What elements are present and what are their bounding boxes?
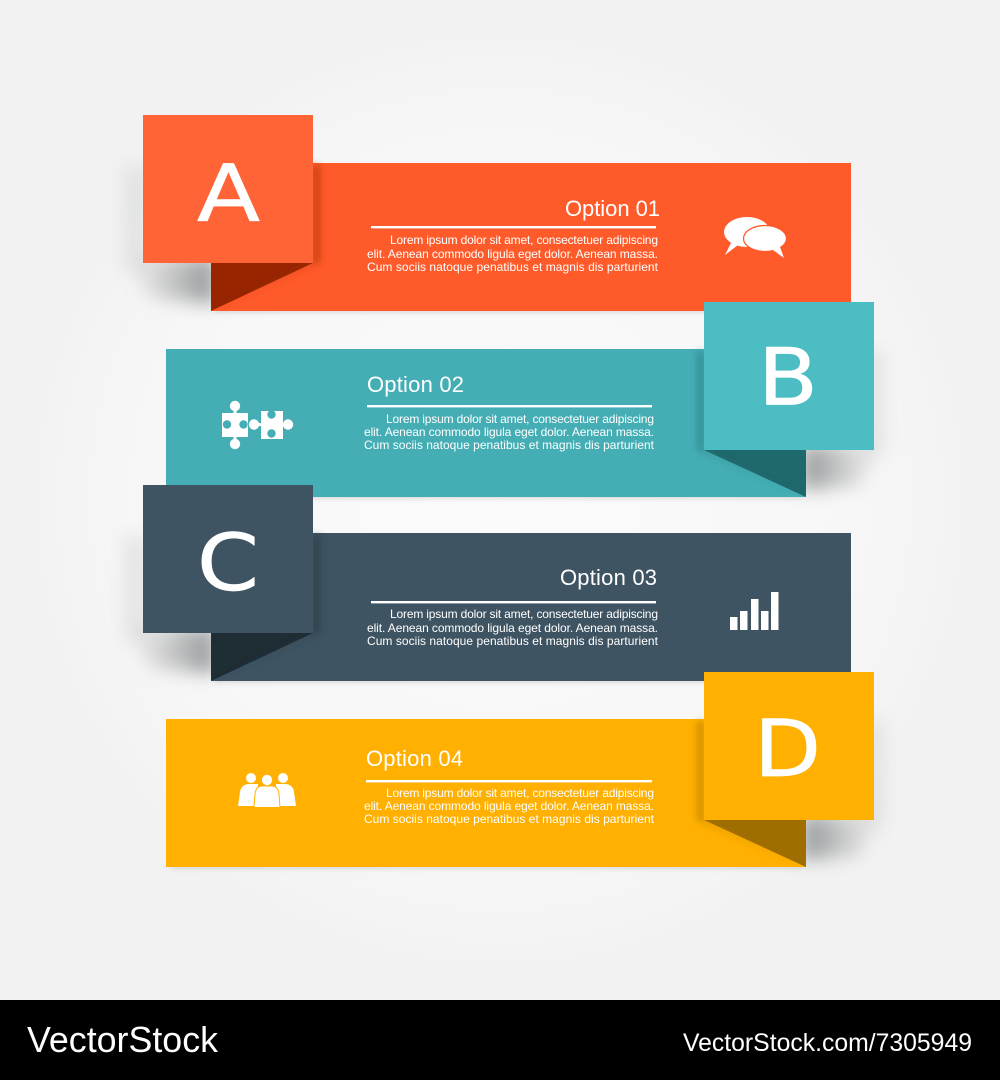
- square C: [143, 485, 313, 633]
- panel: option B: [166, 302, 884, 498]
- letter D: D: [754, 705, 821, 795]
- body text B: Lorem ipsum dolor sit amet, consectetuer adipiscing: [386, 412, 654, 426]
- watermark: image id: VectorStock.com/7305949: [683, 1029, 972, 1057]
- fold D: [704, 820, 806, 867]
- body text D: Cum sociis natoque penatibus et magnis dis parturient: [364, 812, 655, 826]
- fold C: [211, 633, 313, 681]
- body text A: elit. Aenean commodo ligula eget dolor. Aenean massa.: [367, 247, 658, 261]
- icon: bar chart: [730, 592, 778, 630]
- body text B: [364, 412, 655, 452]
- body text B: Cum sociis natoque penatibus et magnis dis parturient: [364, 438, 655, 452]
- fold B: [704, 450, 806, 497]
- body text D: elit. Aenean commodo ligula eget dolor. Aenean massa.: [364, 799, 654, 813]
- heading C: Option 03: [560, 565, 657, 590]
- icon: speech bubbles: [724, 217, 786, 258]
- body text A: [367, 233, 659, 274]
- body text A: Cum sociis natoque penatibus et magnis dis parturient: [367, 260, 659, 274]
- panel: option A: [124, 115, 851, 312]
- icon: puzzle pieces: [222, 401, 293, 449]
- watermark bar: [0, 1000, 1000, 1080]
- letter B: B: [758, 334, 818, 424]
- ribbon C: [211, 533, 851, 681]
- body text C: elit. Aenean commodo ligula eget dolor. Aenean massa.: [367, 621, 658, 635]
- body text C: Cum sociis natoque penatibus et magnis dis parturient: [367, 634, 659, 648]
- heading B: Option 02: [367, 372, 464, 397]
- watermark: brand: VectorStock: [27, 1019, 219, 1060]
- letter C: C: [197, 519, 259, 609]
- body text B: elit. Aenean commodo ligula eget dolor. Aenean massa.: [364, 425, 654, 439]
- body text C: [367, 607, 659, 648]
- ribbon A: [211, 163, 851, 311]
- body text C: Lorem ipsum dolor sit amet, consectetuer adipiscing: [390, 607, 658, 621]
- heading A: Option 01: [565, 196, 660, 221]
- body text D: [364, 786, 655, 826]
- heading D: Option 04: [366, 746, 463, 771]
- fold A: [211, 263, 313, 311]
- square B: [704, 302, 874, 450]
- square A: [143, 115, 313, 263]
- ribbon B: [166, 349, 806, 497]
- ribbon D: [166, 719, 806, 867]
- letter A: A: [197, 150, 260, 240]
- body text A: Lorem ipsum dolor sit amet, consectetuer adipiscing: [390, 233, 658, 247]
- panel: option C: [124, 485, 851, 682]
- square D: [704, 672, 874, 820]
- panel: option D: [166, 672, 884, 868]
- icon: people: [238, 773, 296, 808]
- body text D: Lorem ipsum dolor sit amet, consectetuer adipiscing: [386, 786, 654, 800]
